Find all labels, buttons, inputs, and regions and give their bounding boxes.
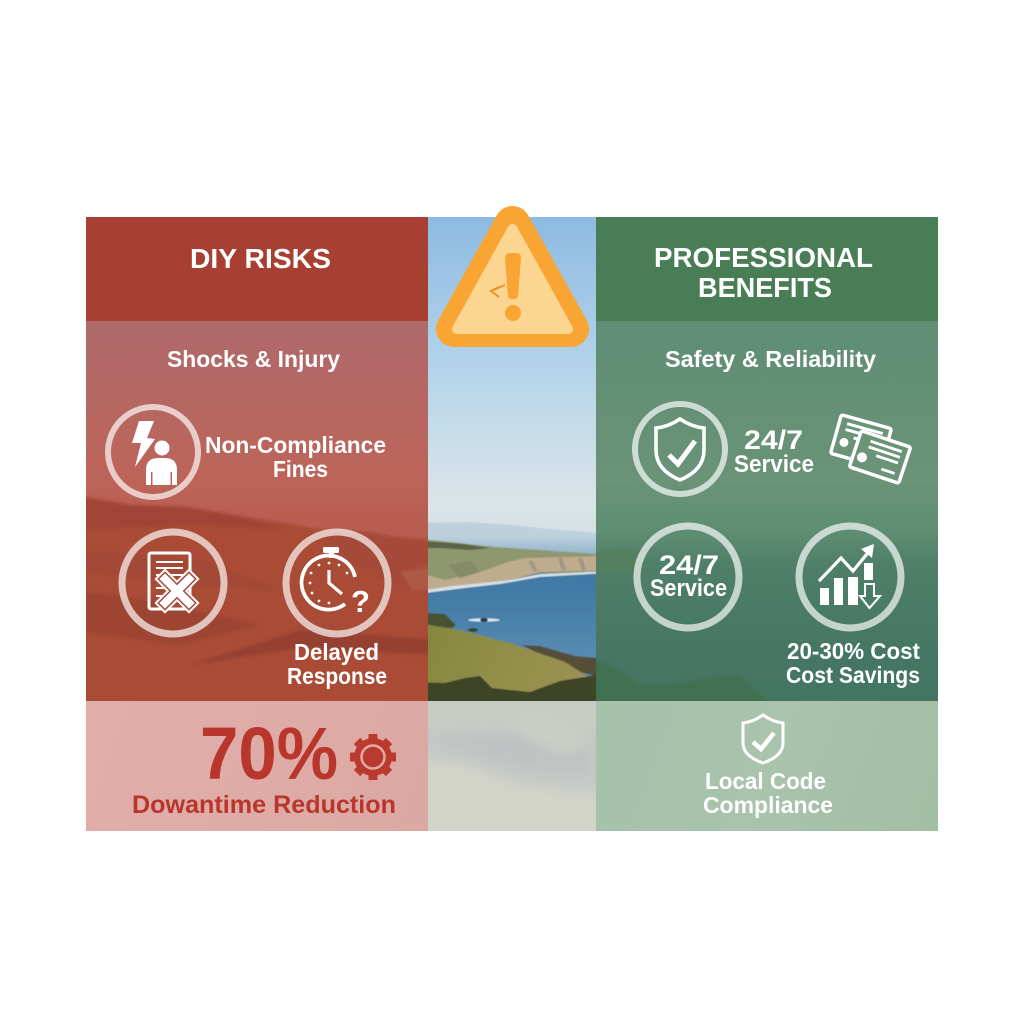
label: Downtime Reduction: Dowantime Reduction (132, 791, 396, 819)
icon: gear (350, 734, 396, 780)
panel: professional benefits (580, 217, 938, 831)
icon: bar chart with cost arrow (799, 526, 901, 628)
label: Non-Compliance Fines: Fines (273, 456, 328, 482)
subheading: Safety and Reliability: Safety & Reliability (665, 346, 876, 372)
icon: licence cards (831, 415, 911, 483)
badge: 24/7 Service (637, 526, 739, 628)
icon: electric shock person (108, 407, 198, 497)
icon: stopwatch with question mark: ? (351, 584, 370, 619)
center landscape photo (428, 217, 596, 701)
label: 20-30% Cost Savings: Cost Savings (786, 662, 920, 688)
heading: Professional Benefits (654, 242, 873, 303)
left middle panel (86, 321, 428, 701)
label: Non-Compliance Fines (205, 432, 386, 482)
label: 20-30% Cost Savings: 20-30% Cost (787, 638, 920, 664)
icon: warning triangle (454, 224, 571, 329)
label: 24/7 Service (734, 425, 814, 478)
badge: 24/7 Service: 24/7 (659, 550, 719, 580)
right header bar (596, 217, 938, 321)
heading: DIY Risks: DIY RISKS (190, 243, 331, 274)
label: 24/7 Service: 24/7 (744, 425, 803, 455)
infographic canvas (86, 206, 938, 831)
right bottom panel (596, 701, 938, 831)
icon: compliance shield (743, 715, 783, 763)
icon: rejected document (122, 532, 224, 634)
heading: Professional Benefits: BENEFITS (698, 272, 832, 303)
icon: shield with check (635, 404, 725, 494)
icon: stopwatch with question mark (286, 532, 388, 634)
panel: DIY risks (70, 217, 440, 831)
label: 20-30% Cost Savings (786, 638, 920, 688)
label: Local Code Compliance (703, 768, 833, 818)
badge: 24/7 Service: Service (650, 575, 727, 602)
label: Delayed Response: Response (287, 663, 387, 689)
right middle panel (580, 321, 938, 712)
center bottom faded grass panel (428, 701, 596, 831)
stat: 70 percent: 70% (200, 712, 338, 795)
label: Delayed Response (287, 639, 387, 689)
label: 24/7 Service: Service (734, 451, 814, 478)
left bottom stat panel (86, 701, 428, 831)
label: Non-Compliance Fines: Non-Compliance (205, 432, 386, 458)
label: Local Code Compliance: Compliance (703, 792, 833, 818)
label: Local Code Compliance: Local Code (705, 768, 826, 794)
subheading: Shocks and Injury: Shocks & Injury (167, 346, 340, 372)
heading: Professional Benefits: PROFESSIONAL (654, 242, 873, 273)
left header bar (86, 217, 428, 321)
label: Delayed Response: Delayed (294, 639, 379, 665)
